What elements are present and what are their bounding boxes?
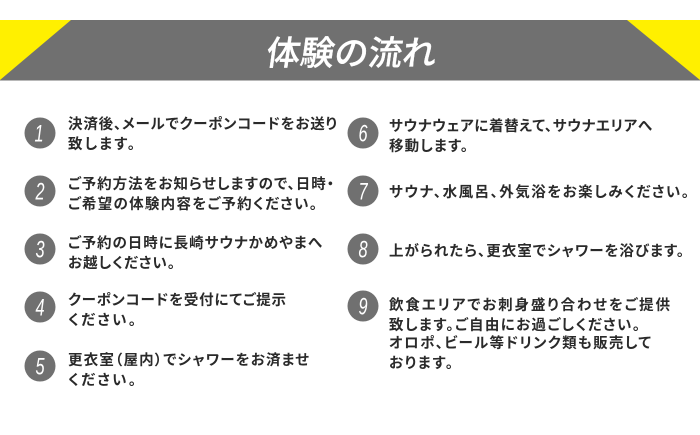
step 9 xyxy=(348,290,670,372)
step 2: ご予約方法をお知らせしますので、日時・ xyxy=(68,175,334,193)
step 9: オロポ、ビール等ドリンク類も販売して xyxy=(389,334,651,352)
step 5 xyxy=(24,350,309,389)
step 6: 移動します。 xyxy=(389,138,468,155)
step 9: 9 xyxy=(358,293,368,320)
step 7: サウナ、水風呂、外気浴をお楽しみください。 xyxy=(389,183,689,201)
step 6: 6 xyxy=(358,120,368,147)
step 2: ご希望の体験内容をご予約ください。 xyxy=(68,195,317,213)
step 1: 決済後、メールでクーポンコードをお送り xyxy=(68,115,337,133)
header banner xyxy=(0,20,700,80)
step 8 xyxy=(348,234,684,264)
step 8: 8 xyxy=(358,236,368,263)
step 9: 飲食エリアでお刺身盛り合わせをご提供 xyxy=(389,296,670,314)
step 8: 上がられたら、更衣室でシャワーを浴びます。 xyxy=(389,242,684,260)
step 7 xyxy=(348,176,689,206)
step 7: 7 xyxy=(358,178,369,205)
step 1 xyxy=(24,115,337,153)
step 2 xyxy=(24,175,334,213)
step 5: 5 xyxy=(35,353,45,380)
step 6: サウナウェアに着替えて、サウナエリアへ xyxy=(389,117,652,135)
step 5: ください。 xyxy=(68,372,136,389)
step 5: 更衣室（屋内）でシャワーをお済ませ xyxy=(68,352,309,369)
step 4: 4 xyxy=(35,294,45,321)
step 3: 3 xyxy=(35,236,45,263)
step 3 xyxy=(24,234,322,272)
title: 体験の流れ xyxy=(264,35,439,73)
step 3: お越しください。 xyxy=(68,255,175,272)
step 6 xyxy=(348,117,652,155)
step 1: 致します。 xyxy=(68,136,135,153)
step 1: 1 xyxy=(34,120,44,147)
step 9: おります。 xyxy=(389,355,453,372)
step 4: ください。 xyxy=(68,312,136,329)
step 2: 2 xyxy=(35,178,45,205)
step 4: クーポンコードを受付にてご提示 xyxy=(68,291,286,309)
step 9: 致します。ご自由にお過ごしください。 xyxy=(389,316,640,334)
step 3: ご予約の日時に長崎サウナかめやまへ xyxy=(68,234,322,252)
step 4 xyxy=(24,291,286,329)
